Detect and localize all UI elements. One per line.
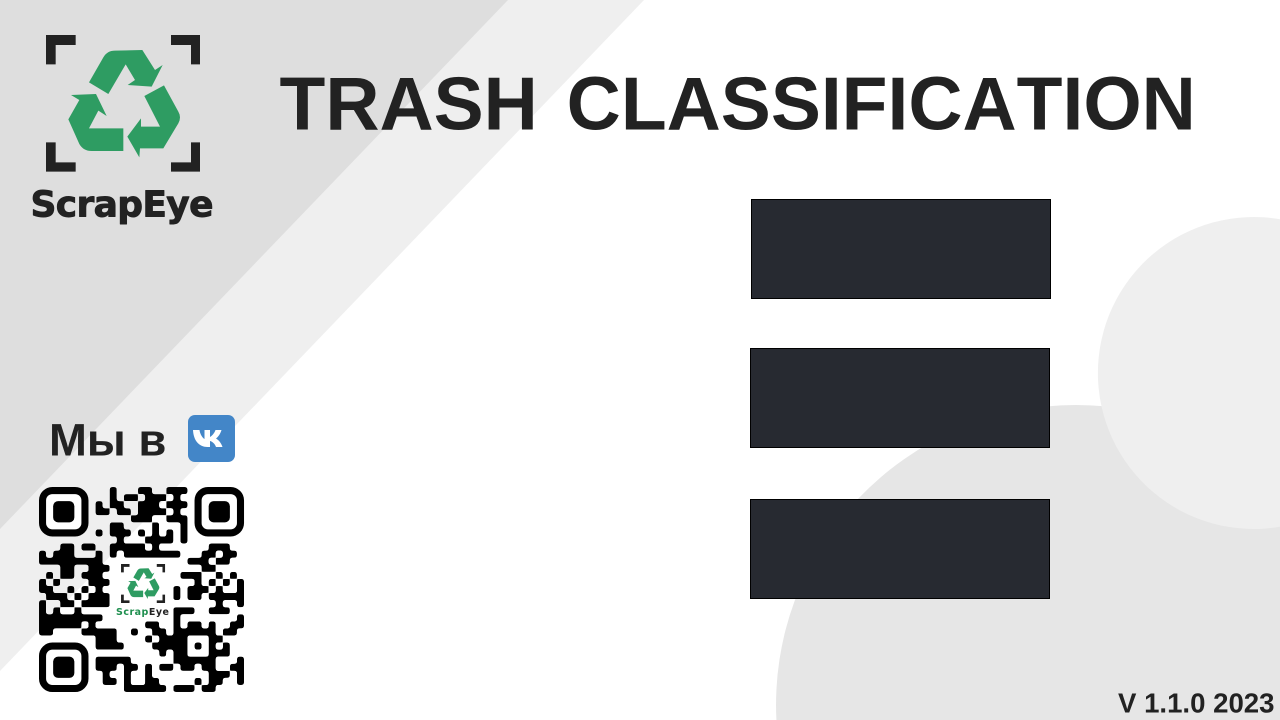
title: TRASH CLASSIFICATION (280, 62, 1196, 146)
panel: middle dark box (750, 348, 1050, 448)
icon: VK (188, 415, 235, 462)
panel: top dark box (752, 200, 1050, 298)
logo: ScrapEye (30, 35, 214, 226)
icon: recycling symbol with corner brackets (46, 35, 200, 172)
QR centre wordmark: ScrapEye (116, 607, 169, 618)
version label: V 1.1.0 2023 (1118, 687, 1274, 718)
logo wordmark: ScrapEye (30, 184, 214, 226)
social heading: Мы в (49, 415, 166, 466)
QR code (43, 491, 240, 688)
panel: bottom dark box (750, 500, 1050, 598)
icon: QR centre logo (121, 564, 165, 603)
